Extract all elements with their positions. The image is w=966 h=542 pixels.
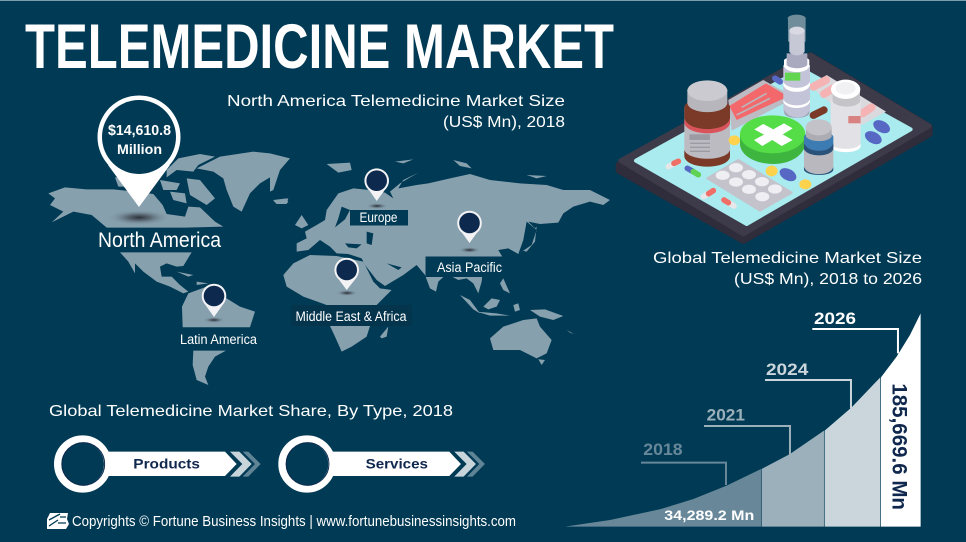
label: Middle East & Africa: Middle East & Africa (296, 309, 407, 324)
white bottle (831, 80, 861, 152)
label: Asia Pacific (426, 256, 510, 277)
illustration: tablet with medicines (620, 15, 929, 239)
green cross disc (740, 115, 805, 164)
area: 2018 (565, 469, 761, 527)
marker: 2024 (765, 360, 851, 408)
marker: 2018: 2018 (643, 440, 683, 459)
pin: Europe (364, 168, 389, 209)
heading: North America market size: North America Telemedicine Market Size (227, 93, 565, 110)
label: Latin America (160, 328, 270, 350)
medicine box (728, 80, 784, 131)
label: North America: North America (98, 229, 221, 252)
pin: North America callout: $14,610.8 (108, 122, 171, 139)
large brown bottle (684, 80, 730, 167)
landmass: Eurasia, Africa and Oceania (270, 158, 610, 365)
heading: North America market size: (US$ Mn), 2018 (443, 114, 565, 131)
marker: 2026 (812, 309, 898, 353)
landmass: South America (182, 287, 255, 385)
landmass: North and Central America (48, 152, 290, 385)
area: 2021 (762, 431, 824, 527)
small blue bottle (804, 119, 833, 175)
heading: global market size (653, 250, 922, 288)
heading: global market size: (US$ Mn), 2018 to 2026 (734, 271, 922, 288)
heading: North America market size (227, 93, 565, 131)
world map (48, 152, 610, 385)
label: Middle East & Africa (292, 305, 412, 326)
label: North America (20, 228, 280, 252)
blister pack: white tablets (707, 160, 792, 211)
button: Products (58, 439, 261, 489)
label: Latin America: Latin America (180, 332, 257, 347)
inland seas (335, 207, 537, 270)
pin: Latin America (202, 284, 226, 323)
marker: 2021 (704, 406, 790, 455)
heading: market share by type: Global Telemedicine Market Share, By Type, 2018 (49, 403, 453, 420)
value: 2026: 185,669.6 Mn (888, 383, 912, 510)
heading: global market size: Global Telemedicine Market Size (653, 250, 922, 267)
copyright line: Copyrights © Fortune Business Insights | www.fortunebusinessinsights.com (72, 513, 516, 530)
landmass: Greenland (197, 152, 290, 212)
pin: North America callout: Million (117, 141, 162, 157)
button: Services: Services (366, 455, 428, 471)
area: 2026 (881, 313, 921, 527)
marker: 2021: 2021 (707, 406, 745, 425)
pin: Middle East & Africa (334, 258, 359, 296)
tablet screen (636, 69, 911, 224)
pin: North America callout (98, 96, 180, 226)
logo: Fortune Business Insights (47, 513, 69, 529)
growth chart (565, 309, 921, 527)
blister pack: capsules (810, 75, 886, 126)
marker: 2024: 2024 (766, 360, 809, 379)
label: Europe: Europe (360, 210, 398, 225)
tablet body (620, 57, 928, 239)
pills (668, 78, 892, 206)
pin: Asia Pacific (457, 211, 482, 253)
label: Asia Pacific: Asia Pacific (437, 260, 502, 275)
marker: 2018 (641, 440, 726, 485)
area: 2024 (825, 377, 880, 527)
spray bottle (783, 15, 810, 118)
marker: 2026: 2026 (814, 309, 856, 328)
value: 2018: 34,289.2 Mn (664, 507, 754, 523)
title: TELEMEDICINE MARKET (25, 12, 614, 82)
button: Services (282, 439, 485, 489)
button: Products: Products (133, 455, 200, 471)
